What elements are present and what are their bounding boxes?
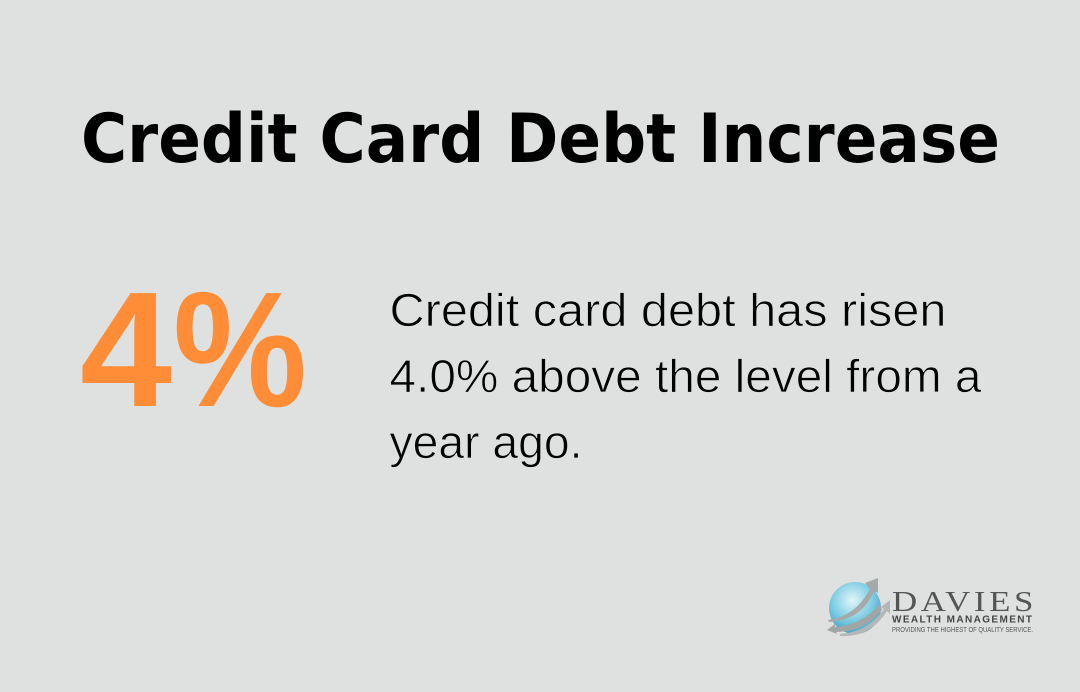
big statistic: 4% (80, 258, 307, 441)
description text (390, 284, 982, 468)
big statistic: 4%: % (173, 258, 307, 441)
description text: 4.0% above the level from a (390, 350, 982, 402)
wordmark: DAVIES: DAVIES (892, 586, 1037, 618)
icon: globe with arrows (827, 578, 890, 636)
tagline: PROVIDING THE HIGHEST OF QUALITY SERVICE. (892, 625, 1033, 634)
title: Credit Card Debt Increase (81, 100, 1000, 179)
description text: year ago. (390, 416, 582, 468)
wordmark: WEALTH MANAGEMENT: WEALTH MANAGEMENT (892, 614, 1032, 626)
logo: Davies Wealth Management (827, 578, 1037, 636)
big statistic: 4%: 4 (80, 258, 172, 441)
description text: Credit card debt has risen (390, 284, 946, 336)
